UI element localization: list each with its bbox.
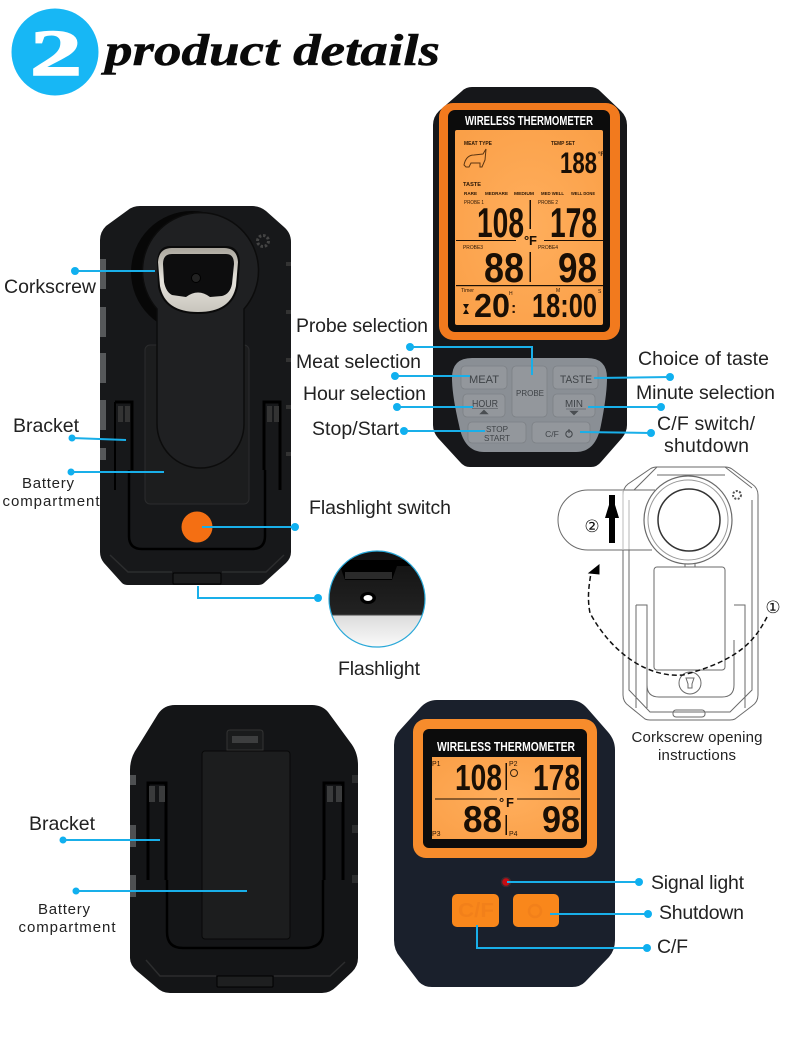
device: back with corkscrew <box>100 206 291 585</box>
button: C/F power <box>532 422 590 443</box>
callout: minute selection <box>588 382 775 411</box>
left bracket <box>148 783 166 880</box>
callout: shutdown: Shutdown <box>659 902 744 924</box>
button: C/F: C/F <box>458 900 494 922</box>
callout: C/F: C/F <box>657 936 688 958</box>
LCD screen: TASTE <box>463 182 482 188</box>
heading: wireless thermometer: WIRELESS THERMOMETER <box>465 114 593 128</box>
icon: hourglass <box>463 304 469 314</box>
callout: stop start <box>312 418 485 440</box>
diagram: corkscrew opening instructions <box>558 467 781 720</box>
LCD screen: °F <box>524 233 537 248</box>
button: min <box>553 394 595 417</box>
magnifier: flashlight detail <box>329 551 430 647</box>
LCD screen: PROBE 1 <box>464 200 484 206</box>
LCD screen: 88 <box>463 799 502 840</box>
battery cover <box>202 751 290 939</box>
LCD screen: 88 <box>484 244 524 291</box>
LCD screen: PROBE3 <box>463 245 483 251</box>
callout: choice of taste <box>594 348 769 381</box>
callout: signal light: Signal light <box>651 872 745 894</box>
callout: shutdown <box>550 902 744 924</box>
button: meat <box>461 366 507 389</box>
LCD screen: Timer <box>461 288 474 294</box>
button: min: MIN <box>565 399 583 410</box>
LCD screen: °F <box>598 152 604 158</box>
bottom tab <box>173 573 221 584</box>
icon: cow <box>464 149 486 167</box>
callout: battery compartment lower: Battery <box>38 901 90 918</box>
LCD screen: 188 <box>560 147 597 180</box>
LCD screen: MEDRARE <box>485 191 509 197</box>
label: flashlight: Flashlight <box>338 658 421 680</box>
device: front with keypad <box>433 87 627 467</box>
LCD screen: WELL DONE <box>571 191 596 197</box>
button: C/F power: C/F <box>545 429 559 439</box>
device: receiver front <box>394 700 615 987</box>
step marker 2: ② <box>584 517 600 537</box>
title badge: number 2 <box>12 8 98 96</box>
device: back with battery compartment <box>130 705 358 993</box>
gear mark <box>258 236 268 246</box>
callout: C/F <box>477 925 688 958</box>
LCD screen: MED WELL <box>541 191 564 197</box>
LCD screen: 98 <box>542 799 580 840</box>
keypad <box>452 358 607 452</box>
callout: hour selection: Hour selection <box>303 383 426 405</box>
LCD screen: S <box>598 289 602 295</box>
caption: corkscrew opening instructions: instructions <box>658 747 736 764</box>
LCD screen: P3 <box>432 831 441 838</box>
LCD screen: 98 <box>558 244 597 291</box>
button: taste <box>553 366 598 389</box>
LCD screen: 108 <box>477 199 524 246</box>
button: hour: HOUR <box>472 399 498 410</box>
arrow: slide up <box>609 495 615 543</box>
title badge: number 2: 2 <box>30 17 82 90</box>
LCD screen: 178 <box>533 757 580 798</box>
left bracket <box>115 402 132 490</box>
opener metal <box>157 246 240 314</box>
bracket channel <box>167 880 323 948</box>
LCD screen: 20 <box>474 287 510 324</box>
diagram body outline <box>623 467 758 720</box>
callout: battery compartment: Battery <box>22 475 74 492</box>
callout: choice of taste: Choice of taste <box>638 348 769 370</box>
arrow: rotate dashed <box>588 573 767 675</box>
callout: battery compartment lower: compartment <box>18 919 116 936</box>
button: probe <box>512 366 547 417</box>
LCD screen: MEAT TYPE <box>464 141 492 147</box>
callout: battery compartment lower <box>18 888 247 936</box>
callout: flashlight switch: Flashlight switch <box>309 497 451 519</box>
button: power <box>513 894 559 927</box>
callout: meat selection <box>296 351 470 380</box>
callout: C/F switch shutdown: shutdown <box>664 435 749 457</box>
callout: flashlight connector <box>198 586 322 602</box>
callout: corkscrew <box>4 267 155 298</box>
battery cover <box>145 345 249 504</box>
button: taste: TASTE <box>560 374 592 386</box>
bottom tab <box>217 976 273 987</box>
callout: meat selection: Meat selection <box>296 351 421 373</box>
callout: bracket lower <box>29 813 160 844</box>
LCD screen: H <box>509 291 513 297</box>
callout: battery compartment <box>2 468 164 510</box>
LCD screen: 18:00 <box>532 287 597 324</box>
callout: minute selection: Minute selection <box>636 382 775 404</box>
button: meat: MEAT <box>469 374 499 386</box>
callout: probe selection <box>296 315 532 375</box>
button: stop start: STOP <box>486 425 508 434</box>
LCD screen <box>455 130 604 325</box>
LCD screen: °F <box>499 795 514 810</box>
bracket channel <box>129 470 265 549</box>
right bracket <box>324 783 343 880</box>
step marker 1: ① <box>765 598 781 618</box>
LCD screen: 108 <box>455 757 502 798</box>
callout: C/F switch shutdown: C/F switch/ <box>657 413 756 435</box>
button: stop start <box>468 422 526 443</box>
right bracket <box>264 402 280 490</box>
corkscrew arm <box>131 211 253 333</box>
callout: battery compartment: compartment <box>2 493 100 510</box>
LCD screen: TEMP SET <box>551 141 576 147</box>
LCD screen: M <box>556 288 560 294</box>
callout: probe selection: Probe selection <box>296 315 428 337</box>
button: probe: PROBE <box>516 389 544 398</box>
LCD screen: P1 <box>432 761 441 768</box>
button: hour <box>463 394 505 417</box>
LCD screen: P4 <box>509 831 518 838</box>
orange flashlight button <box>182 512 212 542</box>
callout: bracket: Bracket <box>13 415 80 437</box>
orange bezel <box>439 103 620 340</box>
callout: bracket lower: Bracket <box>29 813 96 835</box>
orange bezel <box>413 719 597 858</box>
caption: corkscrew opening instructions <box>632 729 762 764</box>
LCD screen <box>432 757 581 840</box>
caption: corkscrew opening instructions: Corkscrew opening <box>632 729 762 746</box>
title: product details: product details <box>100 26 440 75</box>
LCD screen: RARE <box>464 191 478 197</box>
button: stop start: START <box>484 434 510 443</box>
LCD screen: MEDIUM <box>514 191 534 197</box>
signal light <box>502 878 510 886</box>
heading: wireless thermometer: WIRELESS THERMOMETER <box>437 739 575 754</box>
callout: stop start: Stop/Start <box>312 418 400 440</box>
callout: bracket <box>13 415 126 442</box>
side ribs <box>100 259 291 460</box>
LCD screen: 178 <box>550 199 597 246</box>
LCD screen: PROBE4 <box>538 245 558 251</box>
callout: flashlight switch <box>202 497 451 531</box>
cover latch <box>227 730 263 750</box>
button: C/F <box>452 894 499 927</box>
callout: corkscrew: Corkscrew <box>4 276 97 298</box>
LCD screen: PROBE 2 <box>538 200 558 206</box>
callout: C/F switch shutdown <box>580 413 756 457</box>
LCD screen: : <box>511 300 516 317</box>
LCD screen: P2 <box>509 761 518 768</box>
callout: hour selection <box>303 383 473 411</box>
rotated arm <box>558 490 655 550</box>
callout: signal light <box>507 872 745 894</box>
